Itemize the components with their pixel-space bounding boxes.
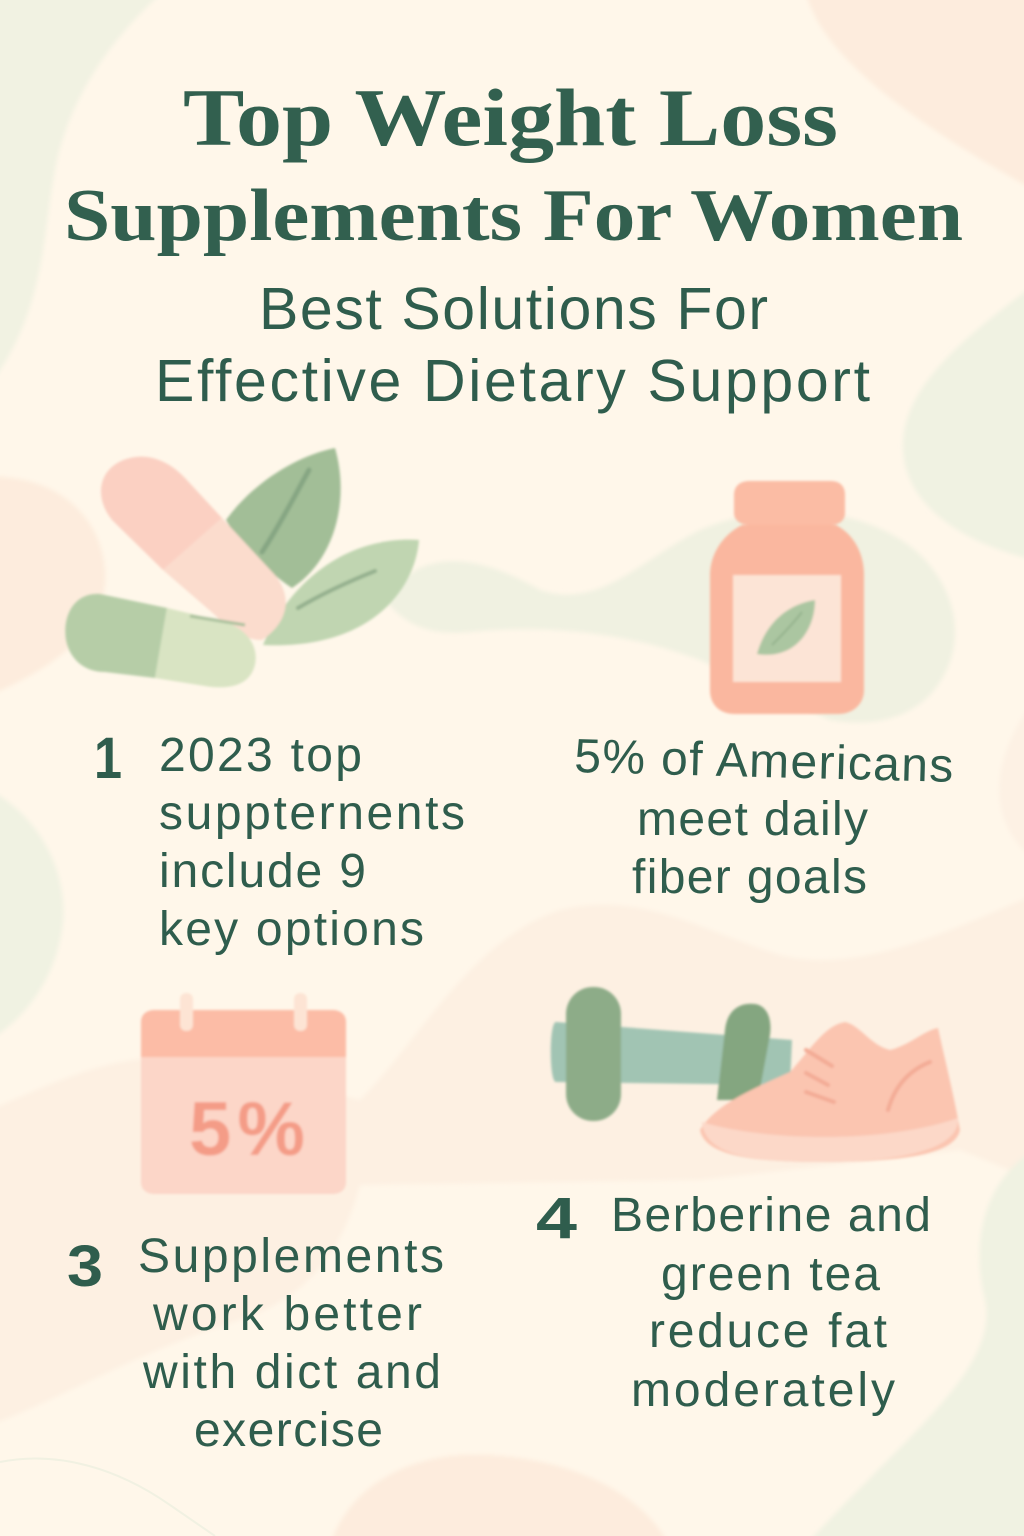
item 1 (94, 726, 465, 956)
item 1: 2023 top (159, 729, 362, 782)
icon: pink capsule (101, 457, 222, 570)
item 3: 3 (67, 1234, 103, 1299)
icon: calendar: 5% (189, 1087, 305, 1172)
icon: capsules and leaves (65, 448, 419, 687)
icon: dumbbell and sneaker (551, 987, 960, 1162)
item 4: reduce fat (649, 1305, 887, 1358)
item 4: green tea (661, 1248, 880, 1301)
item 2: 5% of Americans (574, 730, 954, 793)
icon: supplement bottle (710, 481, 864, 714)
icon: right leaf (263, 540, 419, 645)
item 3: Supplements (138, 1230, 444, 1283)
item 2: meet daily (637, 793, 868, 846)
icon: calendar (141, 993, 346, 1194)
item 1: suppternents (159, 787, 465, 840)
icon: dumbbell bar (551, 1022, 792, 1085)
subtitle (155, 276, 870, 414)
item 4: Berberine and (611, 1189, 931, 1242)
item 2: fiber goals (632, 851, 867, 904)
item 2 (574, 730, 954, 904)
item 1: 1 (94, 726, 122, 791)
icon: dumbbell weights (566, 987, 621, 1121)
subtitle: Effective Dietary Support (155, 348, 870, 414)
item 1: key options (159, 903, 424, 956)
title: Top Weight Loss (183, 72, 838, 163)
item 1: include 9 (159, 845, 366, 898)
title: Supplements For Women (64, 175, 963, 257)
item 3: exercise (194, 1404, 383, 1457)
subtitle: Best Solutions For (259, 276, 768, 342)
item 4 (536, 1186, 931, 1417)
item 3 (67, 1230, 444, 1457)
item 3: work better (152, 1288, 422, 1341)
item 4: 4 (536, 1186, 577, 1251)
item 3: with dict and (142, 1346, 441, 1399)
title (64, 72, 963, 257)
icon: sneaker (700, 1022, 960, 1162)
icon: green capsule (65, 594, 167, 678)
item 4: moderately (631, 1364, 895, 1417)
icon: top leaf (226, 448, 341, 588)
